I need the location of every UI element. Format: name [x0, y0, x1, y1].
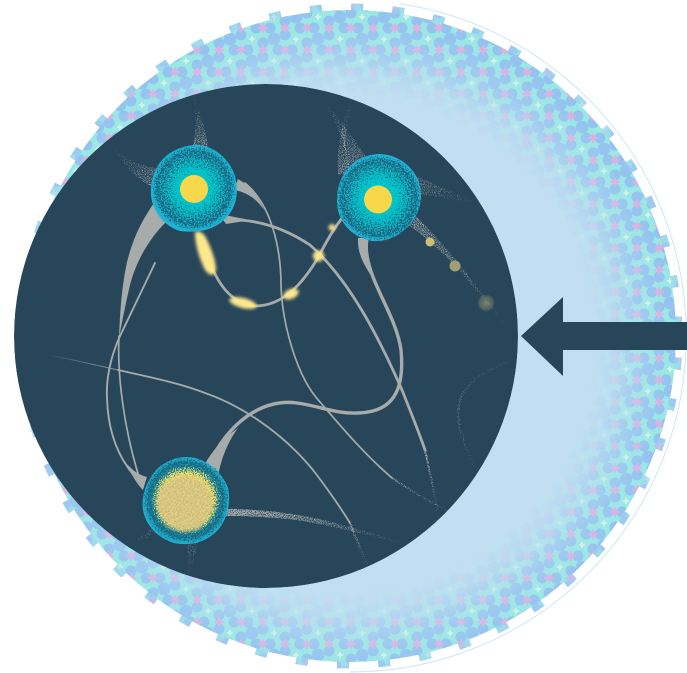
cell body	[143, 457, 229, 544]
dark background	[14, 84, 518, 588]
arrow pointing left	[521, 297, 687, 376]
neuron: bottom left, activated	[142, 456, 230, 544]
nucleus	[180, 175, 208, 203]
faint stalks and dissolving fibers	[108, 94, 518, 584]
axon beads	[426, 238, 495, 312]
tapered fiber bases	[119, 179, 374, 490]
solid gray fibers	[48, 183, 425, 523]
neuron: top left	[151, 145, 237, 232]
stippling	[151, 145, 237, 231]
yellow myelin segments	[195, 224, 495, 312]
neuron: top right	[335, 154, 423, 242]
stippling	[142, 456, 230, 544]
nucleus	[364, 186, 392, 214]
fibers	[48, 94, 518, 584]
grainy core	[154, 472, 216, 534]
cell body	[337, 154, 421, 241]
dark circle: magnified neuron view	[14, 84, 518, 588]
cell body	[151, 145, 237, 232]
myelin blobs	[195, 224, 335, 311]
yellow halo	[150, 464, 222, 536]
thin outline arc on the right	[350, 4, 686, 672]
stippling	[335, 154, 423, 242]
